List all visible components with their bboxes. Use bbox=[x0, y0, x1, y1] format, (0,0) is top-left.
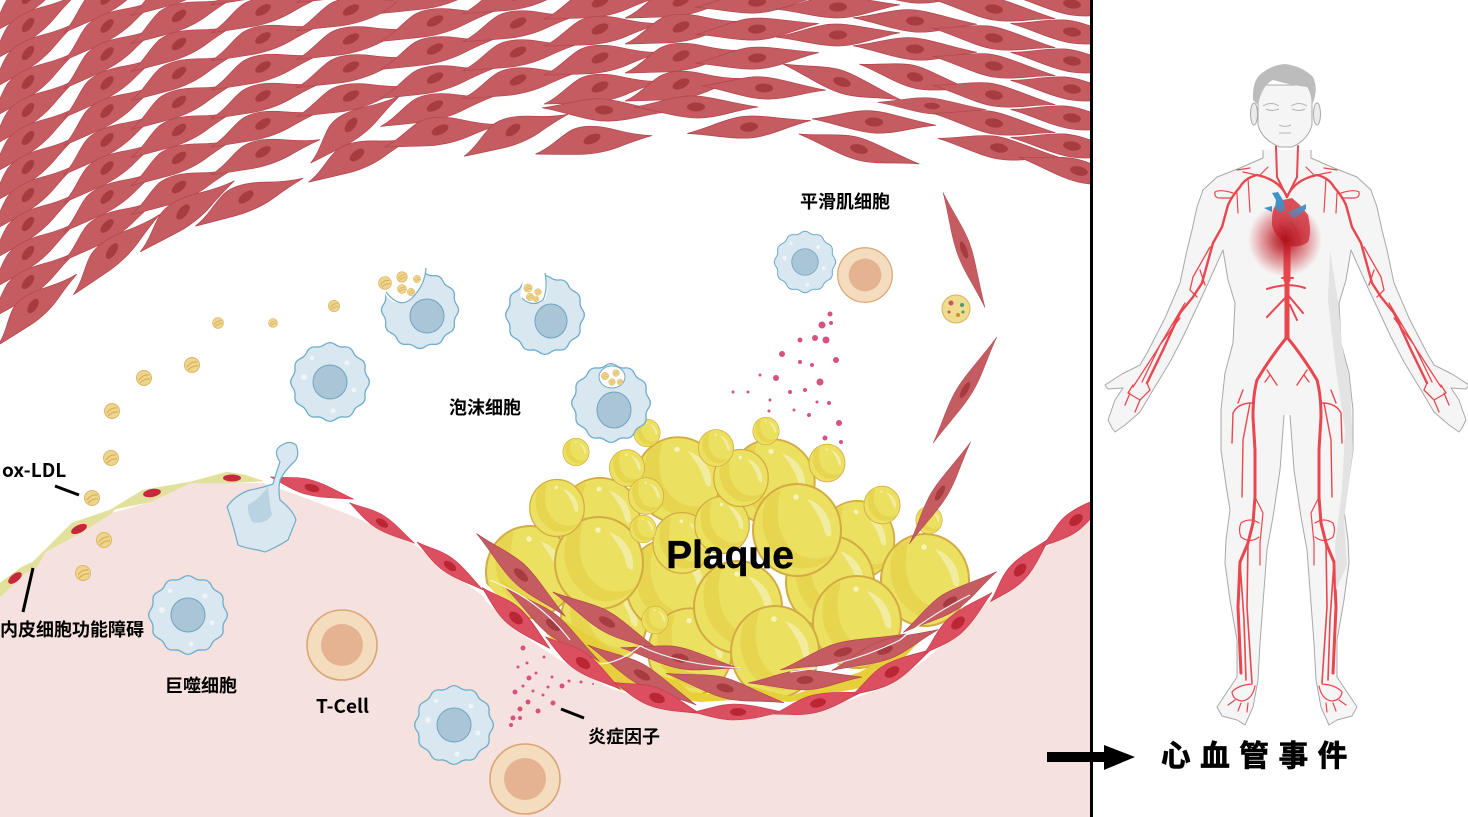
heart bbox=[1264, 192, 1310, 246]
leader: endothelial dysfunction bbox=[23, 568, 33, 612]
inflammatory factors: plaque side bbox=[732, 312, 843, 444]
arrow to cardiovascular events bbox=[1047, 745, 1135, 770]
macrophages and foam cells bbox=[149, 231, 836, 764]
label: endothelial dysfunction: 内皮细胞功能障碍 bbox=[0, 619, 144, 640]
plaque: lipid droplets bbox=[486, 417, 969, 698]
label: foam cell: 泡沫细胞 bbox=[449, 397, 521, 418]
migrating smooth muscle cells bbox=[903, 190, 1003, 548]
label: smooth muscle cell: 平滑肌细胞 bbox=[800, 192, 890, 212]
label: inflammatory factors: 炎症因子 bbox=[588, 727, 660, 747]
tissue: arterial wall bbox=[0, 483, 1090, 817]
smooth muscle cell layer bbox=[0, 0, 1142, 351]
leader: ox-LDL bbox=[55, 486, 79, 495]
head bbox=[1250, 64, 1320, 147]
ox-LDL particles bbox=[76, 272, 623, 580]
dysfunctional endothelium bbox=[0, 472, 263, 597]
fibrous cap over plaque bbox=[470, 526, 1005, 716]
inflammatory factors: tissue side bbox=[509, 646, 594, 727]
label: ox-LDL: ox-LDL bbox=[2, 456, 66, 483]
T cells bbox=[307, 248, 892, 814]
label: T cell: T-Cell bbox=[316, 692, 369, 719]
foam particle bbox=[942, 295, 970, 323]
macrophage crossing endothelium bbox=[227, 442, 298, 552]
leader: inflammatory factors bbox=[561, 709, 584, 718]
endothelial layer: healthy red cells bbox=[268, 469, 1116, 723]
heart glow bbox=[1248, 203, 1322, 277]
arteries: aorta and abdominal branches bbox=[1267, 240, 1305, 337]
divider line bbox=[1090, 0, 1093, 817]
label: macrophage: 巨噬细胞 bbox=[165, 676, 237, 696]
plaque label: Plaque bbox=[666, 534, 794, 577]
label: cardiovascular events: 心血管事件 bbox=[1161, 740, 1357, 773]
human body figure with arterial system bbox=[1105, 64, 1468, 725]
